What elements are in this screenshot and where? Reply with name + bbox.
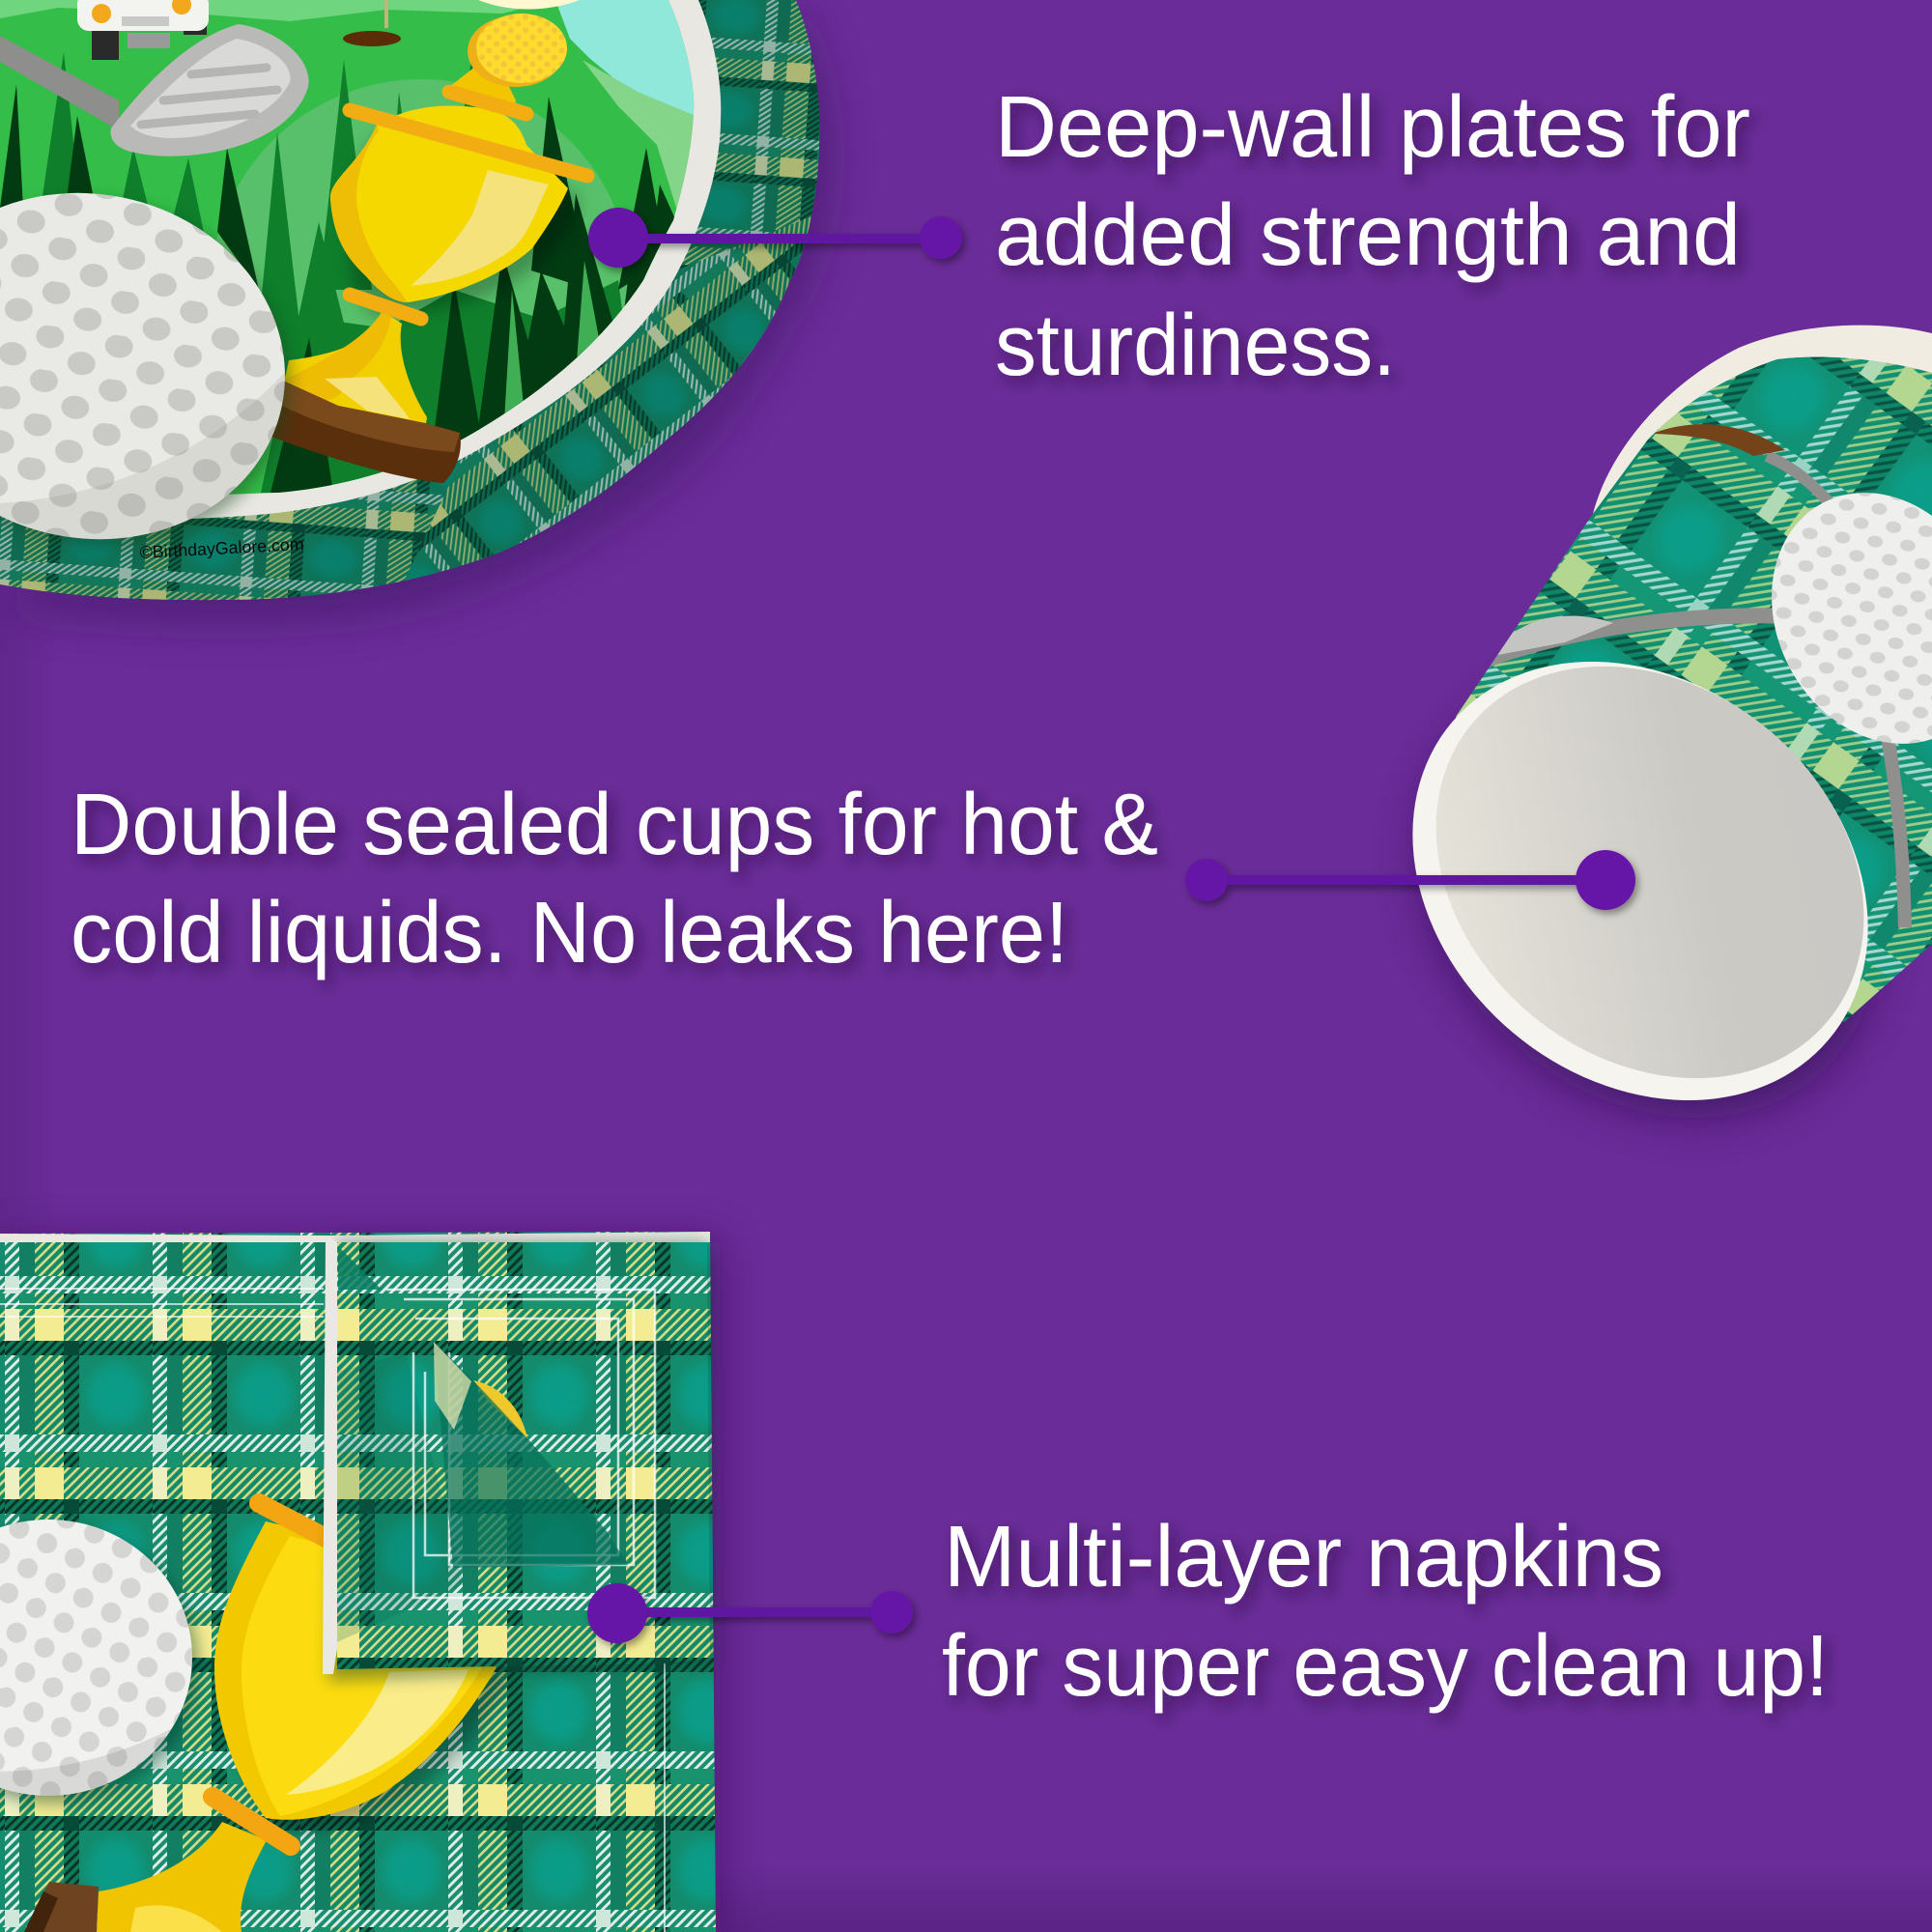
cup rim (1593, 326, 1932, 514)
text: deep-wall plates (995, 79, 1750, 394)
plate copyright text: ©BirthdayGalore.com (139, 534, 304, 562)
printed golf ball (1772, 493, 1932, 744)
text: multi-layer napkins: for super easy clean up! (942, 1618, 1829, 1715)
text: deep-wall plates: added strength and (995, 187, 1741, 284)
plate (0, 0, 869, 623)
hole and flag (343, 0, 401, 46)
text: double sealed cups: Double sealed cups for hot & (71, 777, 1158, 873)
text: multi-layer napkins (942, 1509, 1829, 1715)
napkin plaid sheet (0, 1232, 716, 1932)
printed trophy band (1468, 456, 1905, 927)
text: deep-wall plates: Deep-wall plates for (995, 79, 1750, 176)
callout: double sealed cups (71, 777, 1635, 981)
callout: deep-wall plates (588, 79, 1750, 394)
text: deep-wall plates: sturdiness. (995, 298, 1396, 394)
callout: multi-layer napkins (587, 1509, 1829, 1715)
flap fold lines (386, 1290, 655, 1598)
plate golf scene (0, 0, 705, 512)
embossed border lines (0, 1289, 665, 1932)
cup base (1324, 571, 1932, 1191)
pointer: plate (588, 208, 962, 268)
text: double sealed cups: cold liquids. No leaks here! (71, 885, 1068, 981)
curled corner (473, 1380, 527, 1438)
trophy on napkin (24, 1503, 511, 1932)
plate white inner wall (0, 0, 721, 520)
golf cart (77, 0, 209, 60)
napkin white top edge (0, 1232, 710, 1242)
text: double sealed cups (71, 777, 1158, 981)
cup body (1456, 357, 1932, 1022)
cup (1324, 319, 1932, 1208)
pointer: napkin (587, 1583, 913, 1643)
napkins (0, 1232, 720, 1932)
napkin folded flap (323, 1236, 710, 1681)
trophy (271, 14, 587, 483)
golf club (0, 24, 309, 156)
pointer: cup (1185, 850, 1635, 910)
golf ball on napkin (0, 1520, 203, 1816)
grass blades (43, 52, 622, 493)
text: multi-layer napkins: Multi-layer napkins (944, 1509, 1663, 1605)
golf ball (0, 192, 301, 554)
plate plaid rim (0, 0, 869, 618)
